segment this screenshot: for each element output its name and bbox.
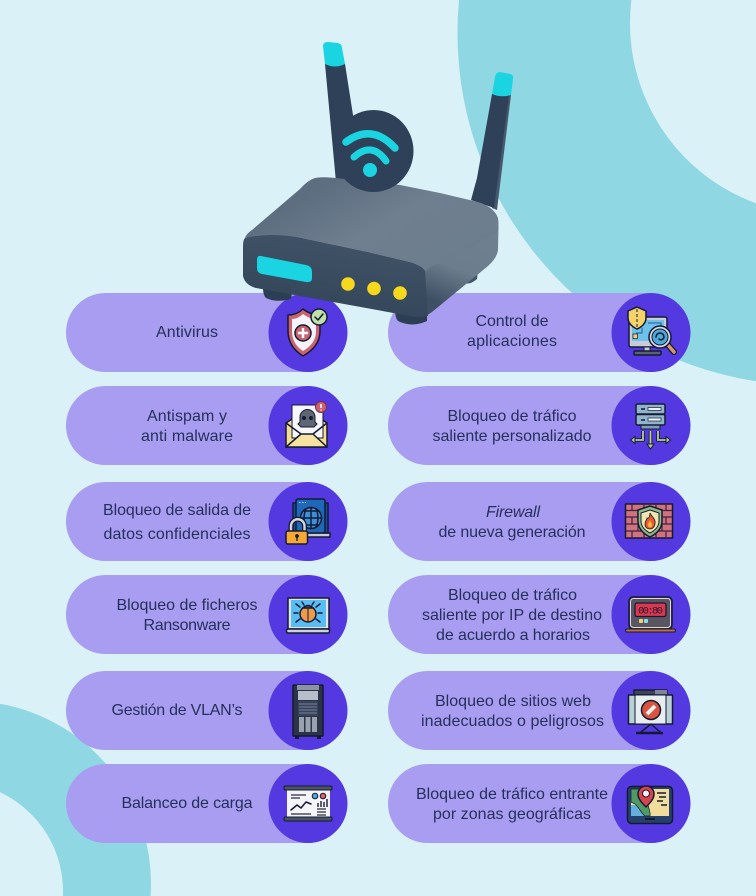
feet: [263, 270, 478, 324]
label: Balanceo de carga: Balanceo de carga: [122, 795, 253, 812]
icon: globe with padlock: [286, 499, 330, 544]
label: Antivirus: Antivirus: [156, 324, 218, 341]
label: Bloqueo de ficheros Ransonware: [116, 597, 258, 634]
icon: laptop with bug: [286, 598, 330, 633]
illustration: wifi router: [243, 42, 513, 324]
label: Bloqueo de tráfico saliente por IP de destino de acuerdo a horarios: saliente por IP de destino: [422, 607, 602, 624]
front face: [243, 235, 428, 317]
label: Bloqueo de tráfico entrante por zonas geográficas: Bloqueo de tráfico entrante: [416, 786, 608, 803]
icon: digital clock: [626, 597, 676, 632]
label: Bloqueo de tráfico saliente personalizado: saliente personalizado: [432, 428, 592, 445]
panel: Balanceo de carga: [66, 764, 348, 843]
label: Bloqueo de tráfico saliente personalizado: [432, 408, 592, 445]
background shape: top right arc: [457, 0, 756, 381]
panel: Gestión de VLAN's: [66, 671, 348, 750]
panel: Control de aplicaciones: [388, 293, 690, 372]
icon: monitor with blocked sign: [628, 690, 672, 733]
label: Bloqueo de salida de datos confidenciales: datos confidenciales: [104, 526, 250, 543]
label: Firewall de nueva generación: de nueva generación: [438, 524, 586, 541]
label: Control de aplicaciones: Control de: [476, 313, 549, 330]
label: Bloqueo de tráfico saliente por IP de destino de acuerdo a horarios: [422, 587, 602, 644]
panel: Bloqueo de sitios web: [388, 671, 690, 750]
status display: [257, 256, 312, 282]
label: Bloqueo de salida de datos confidenciales: Bloqueo de salida de: [103, 502, 251, 519]
label: Bloqueo de salida de datos confidenciales: [103, 502, 251, 543]
label: Bloqueo de sitios web inadecuados o peligrosos: inadecuados o peligrosos: [421, 713, 604, 730]
label: Antispam y anti malware: [141, 408, 233, 445]
panel: Bloqueo de tráfico por IP y horarios: [388, 575, 690, 654]
label: Bloqueo de tráfico entrante por zonas geográficas: [416, 786, 608, 823]
icon: server with outgoing arrows: [630, 404, 670, 449]
right antenna: [471, 72, 513, 210]
icon: monitor with shield and magnifier: [628, 307, 674, 355]
background shape: bottom left arc: [0, 704, 151, 896]
panel: Antispam: [66, 386, 348, 465]
label: Firewall de nueva generación: Firewall: [486, 504, 540, 521]
label: Bloqueo de ficheros Ransonware: Bloqueo de ficheros: [116, 597, 258, 614]
status lights: [341, 277, 407, 300]
icon: dashboard board: [284, 786, 332, 821]
panel: Antivirus: [66, 293, 348, 372]
label: Bloqueo de tráfico saliente por IP de destino de acuerdo a horarios: de acuerdo a horarios: [436, 627, 590, 644]
label: Gestión de VLAN's: Gestión de VLAN’s: [112, 702, 242, 719]
label: Bloqueo de tráfico saliente por IP de destino de acuerdo a horarios: Bloqueo de tráfico: [448, 587, 577, 604]
label: Antispam y anti malware: anti malware: [141, 428, 233, 445]
icon: brick wall with flame shield: [626, 504, 672, 538]
panel: Bloqueo de tráfico entrante por zonas geográficas: [388, 764, 690, 843]
icon: shield with check: [288, 309, 327, 356]
right side face: [416, 215, 498, 316]
label: Bloqueo de tráfico saliente personalizado: Bloqueo de tráfico: [448, 408, 577, 425]
panel: Bloqueo de tráfico saliente personalizado: [388, 386, 690, 465]
label: Control de aplicaciones: aplicaciones: [467, 333, 557, 350]
icon: server rack: [293, 685, 323, 739]
panel: Firewall de nueva generación: [388, 482, 690, 561]
top face: [245, 177, 498, 271]
label: Firewall de nueva generación: [438, 504, 586, 541]
label: Antispam y anti malware: Antispam y: [147, 408, 227, 425]
label: Bloqueo de ficheros Ransonware: Ransonware: [144, 617, 231, 634]
icon: envelope with skull: [286, 402, 327, 447]
label: Bloqueo de tráfico entrante por zonas geográficas: por zonas geográficas: [433, 806, 591, 823]
label: Control de aplicaciones: [467, 313, 557, 350]
left antenna: [323, 42, 353, 182]
panel: Bloqueo de salida de datos: [66, 482, 348, 561]
clock display text: 00:80: [638, 606, 663, 618]
label: Bloqueo de sitios web inadecuados o peligrosos: Bloqueo de sitios web: [435, 693, 591, 710]
label: Bloqueo de sitios web inadecuados o peligrosos: [421, 693, 604, 730]
panel: Bloqueo de ficheros Ransonware: [66, 575, 348, 654]
router body: [243, 177, 498, 317]
wifi disc: [334, 110, 414, 192]
icon: laptop with map pin: [628, 786, 672, 824]
